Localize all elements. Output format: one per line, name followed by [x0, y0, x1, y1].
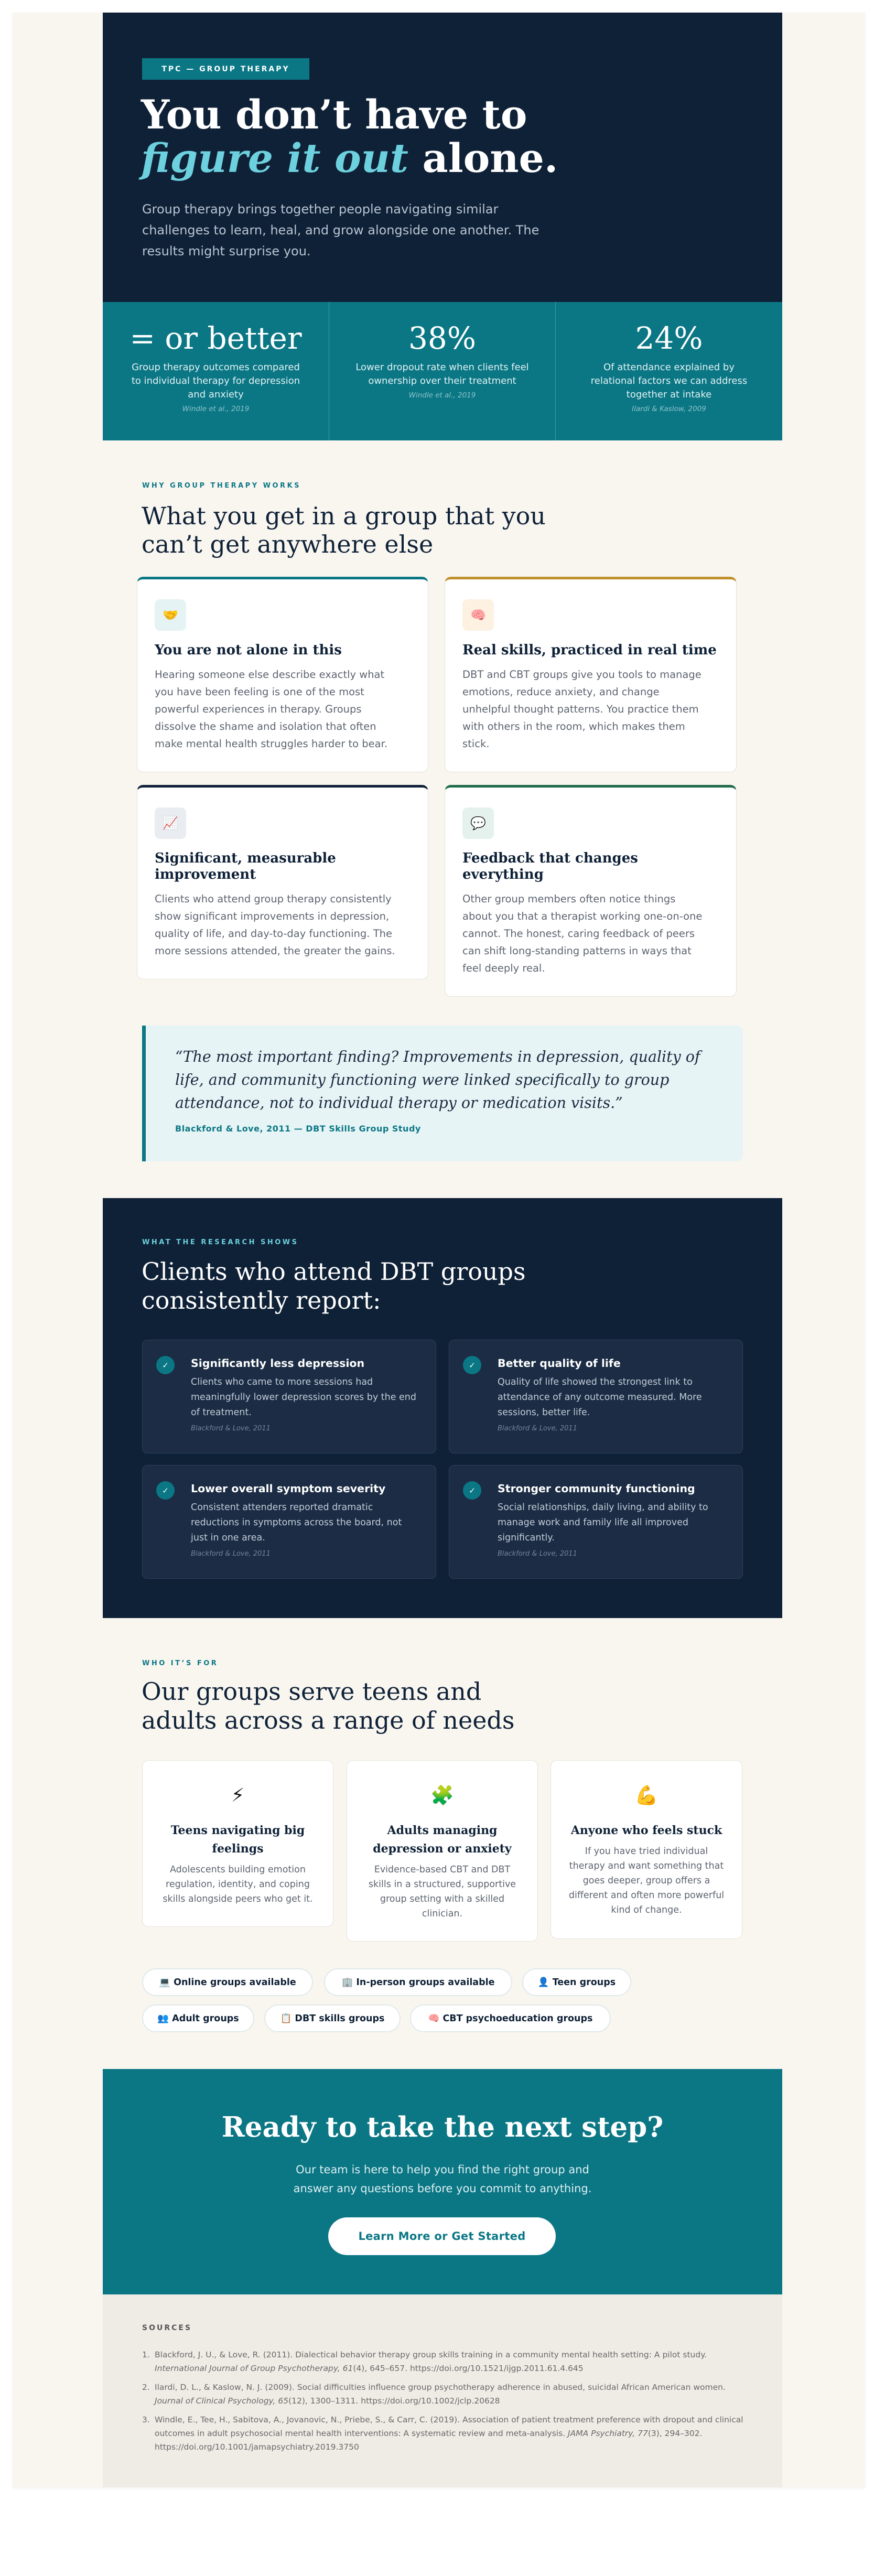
- stat 2: 38%: [408, 320, 476, 356]
- card: real skills: DBT and CBT groups give you tools to manage emotions, reduce anxiety, and change unhelpful thought patterns. You practice them with others in the room, which makes them stick.: [462, 669, 701, 750]
- card: real skills: [445, 577, 737, 772]
- reference list: Blackford, J. U., & Love, R. (2011). Dialectical behavior therapy group skills training in a community mental health setting: A pilot study. International Journal of Group Psychotherapy, 61(4), 645–657. https://doi.org/10.1521/ijgp.2011.61.4.645: [155, 2350, 707, 2373]
- title: [138, 91, 558, 181]
- card: real skills: Real skills, practiced in real time: [462, 642, 717, 658]
- result: symptoms: Blackford & Love, 2011: [191, 1550, 271, 1558]
- quote callout: [142, 1026, 743, 1161]
- pill: dbt: 📋 DBT skills groups: [280, 2013, 384, 2024]
- reference list: Windle, E., Tee, H., Sabitova, A., Jovanovic, N., Priebe, S., & Carr, C. (2019). Association of patient treatment preference with dropout and clinical outcomes in adult psychosocial mental health interventions: A systematic review and meta-analysis. JAMA Psychiatry, 77(3), 294–302. https://doi.org/10.1001/jamapsychiatry.2019.3750: [155, 2415, 743, 2452]
- section heading: why: can’t get anywhere else: [142, 530, 433, 558]
- reference list: 3.: [142, 2415, 150, 2424]
- result: quality of life: Quality of life showed the strongest link to attendance of any outcome measured. More sessions, better life.: [498, 1377, 702, 1418]
- attribution: Blackford & Love, 2011 — DBT Skills Group Study: [175, 1124, 421, 1134]
- stat 3: [591, 320, 747, 413]
- section label: who: WHO IT’S FOR: [142, 1659, 218, 1667]
- result: depression: [142, 1340, 436, 1453]
- result: quality of life: Better quality of life: [498, 1357, 621, 1370]
- pill: online: 💻 Online groups available: [159, 1977, 296, 1987]
- stat 3: 24%: [635, 320, 703, 356]
- pill: dbt: [264, 2004, 401, 2032]
- stat 1: = or better: [129, 320, 302, 356]
- result: depression: Clients who came to more sessions had meaningfully lower depression scores by the end of treatment.: [191, 1377, 416, 1418]
- CTA text: answer any questions before you commit to anything.: [294, 2182, 591, 2195]
- result: community: Blackford & Love, 2011: [498, 1550, 577, 1558]
- CTA title: Ready to take the next step?: [222, 2111, 663, 2143]
- card: not alone: Hearing someone else describe exactly what you have been feeling is one of the most powerful experiences in therapy. Groups dissolve the shame and isolation that often make mental health struggles harder to bear.: [155, 669, 387, 750]
- result: depression: Blackford & Love, 2011: [191, 1425, 271, 1432]
- result: quality of life: Blackford & Love, 2011: [498, 1425, 577, 1432]
- pill: in-person: 🏢 In-person groups available: [341, 1977, 495, 1987]
- reference list: 2.: [142, 2383, 150, 2392]
- icon: 💪: [635, 1785, 658, 1806]
- icon: chart: 📈: [163, 816, 178, 831]
- section heading: why: What you get in a group that you: [142, 502, 546, 530]
- result: symptoms: ✓: [162, 1486, 169, 1495]
- icon: brain: [462, 599, 494, 631]
- result: depression: Significantly less depression: [191, 1357, 364, 1370]
- heading: consistently report:: [142, 1286, 381, 1314]
- title: figure it out alone.: [141, 135, 558, 181]
- stat 3: Of attendance explained by relational factors we can address together at intake: [591, 362, 747, 400]
- pill: cbt: 🧠 CBT psychoeducation groups: [428, 2013, 592, 2024]
- icon: 🧩: [430, 1785, 454, 1806]
- pills: [142, 1968, 631, 2032]
- card: measurable: Significant, measurable improvement: [155, 850, 336, 882]
- section label: why: WHY GROUP THERAPY WORKS: [142, 482, 301, 490]
- CTA panel: [103, 2069, 782, 2294]
- sources: [103, 2294, 782, 2487]
- sources label: SOURCES: [142, 2324, 192, 2332]
- label: WHAT THE RESEARCH SHOWS: [142, 1238, 298, 1246]
- result: symptoms: Lower overall symptom severity: [191, 1482, 385, 1495]
- audience card: stuck: Anyone who feels stuck: [571, 1824, 722, 1837]
- hero: [103, 13, 782, 302]
- section heading: why: [142, 502, 546, 558]
- stat 1: Windle et al., 2019: [182, 405, 249, 413]
- result: community: [449, 1465, 743, 1579]
- stat 1: Group therapy outcomes compared to individual therapy for depression and anxiety: [132, 362, 300, 400]
- result: community: Social relationships, daily living, and ability to manage work and family life all improved significantly.: [498, 1502, 708, 1543]
- pill: adult: [142, 2004, 254, 2032]
- result: quality of life: [449, 1340, 743, 1453]
- card: not alone: [137, 577, 428, 772]
- icon: speech: 💬: [470, 816, 486, 831]
- result: symptoms: Consistent attenders reported dramatic reductions in symptoms across the board, not just in one area.: [191, 1502, 402, 1543]
- reference list: [142, 2350, 743, 2452]
- card: feedback: Other group members often notice things about you that a therapist working one-on-one cannot. The honest, caring feedback of peers can shift long-standing patterns in ways that feel deeply real.: [462, 893, 702, 974]
- stat 3: Ilardi & Kaslow, 2009: [632, 405, 706, 413]
- audience card: teens: Teens navigating big feelings: [171, 1824, 305, 1856]
- section heading: who: Our groups serve teens and: [142, 1677, 481, 1706]
- section heading: who: [142, 1677, 514, 1734]
- pill: teen: 👤 Teen groups: [538, 1977, 616, 1987]
- stat 2: [329, 302, 556, 440]
- audience card: adults: Adults managing depression or anxiety: [373, 1824, 512, 1856]
- card: measurable: [137, 785, 428, 979]
- reference list: Ilardi, D. L., & Kaslow, N. J. (2009). Social difficulties influence group psychotherapy adherence in abused, suicidal African American women. Journal of Clinical Psychology, 65(12), 1300–1311. https://doi.org/10.1002/jclp.20628: [155, 2383, 726, 2406]
- card: feedback: [445, 785, 737, 997]
- icon: ⚡: [231, 1785, 244, 1806]
- title: You don’t have to: [141, 91, 527, 138]
- stat 1: [103, 302, 329, 440]
- CTA text: Our team is here to help you find the right group and: [296, 2163, 589, 2176]
- heading: [142, 1257, 526, 1314]
- result: community: Stronger community functioning: [498, 1482, 695, 1495]
- CTA button: [328, 2217, 556, 2255]
- audience card: teens: [142, 1760, 333, 1927]
- quote callout: “The most important finding? Improvements in depression, quality of life, and community functioning were linked specifically to group attendance, not to individual therapy or medication visits.”: [175, 1048, 700, 1112]
- heading: Clients who attend DBT groups: [142, 1257, 526, 1286]
- pill: cbt: [410, 2004, 611, 2032]
- reference list: 1.: [142, 2350, 150, 2359]
- tag: [142, 58, 309, 80]
- pill: online: [142, 1968, 313, 1996]
- audience card: adults: Evidence-based CBT and DBT skills in a structured, supportive group setting with a skilled clinician.: [369, 1864, 516, 1919]
- card: not alone: You are not alone in this: [155, 642, 342, 658]
- result: quality of life: ✓: [469, 1360, 476, 1370]
- stat 2: Windle et al., 2019: [409, 391, 476, 400]
- section heading: who: adults across a range of needs: [142, 1706, 514, 1734]
- pill: teen: [522, 1968, 631, 1996]
- icon: speech: [462, 807, 494, 839]
- CTA button: Learn More or Get Started: [358, 2230, 526, 2243]
- stats band: [103, 302, 782, 440]
- card: feedback: Feedback that changes everything: [462, 850, 638, 882]
- research section: [103, 1198, 782, 1618]
- CTA text: [294, 2163, 591, 2195]
- audience card: adults: [347, 1760, 538, 1942]
- icon: handshake: [155, 599, 186, 631]
- result: symptoms: [142, 1465, 436, 1579]
- card: measurable: Clients who attend group therapy consistently show significant improvements in depression, quality of life, and day-to-day functioning. The more sessions attended, the greater the gains.: [155, 893, 395, 957]
- audience card: stuck: If you have tried individual therapy and want something that goes deeper, group offers a different and often more powerful kind of change.: [569, 1846, 724, 1915]
- pill: adult: 👥 Adult groups: [157, 2013, 239, 2024]
- pill: in-person: [324, 1968, 512, 1996]
- icon: chart: [155, 807, 186, 839]
- audience card: teens: Adolescents building emotion regulation, identity, and coping skills alongside peers who get it.: [163, 1864, 313, 1904]
- result: depression: ✓: [162, 1360, 169, 1370]
- icon: brain: 🧠: [470, 608, 486, 622]
- tag: TPC — GROUP THERAPY: [161, 65, 290, 73]
- icon: handshake: 🤝: [163, 608, 178, 622]
- stat 2: Lower dropout rate when clients feel ownership over their treatment: [355, 362, 529, 386]
- intro text: Group therapy brings together people navigating similar challenges to learn, heal, and grow alongside one another. The results might surprise you.: [142, 202, 539, 258]
- result: community: ✓: [469, 1486, 476, 1495]
- audience card: stuck: [551, 1760, 742, 1939]
